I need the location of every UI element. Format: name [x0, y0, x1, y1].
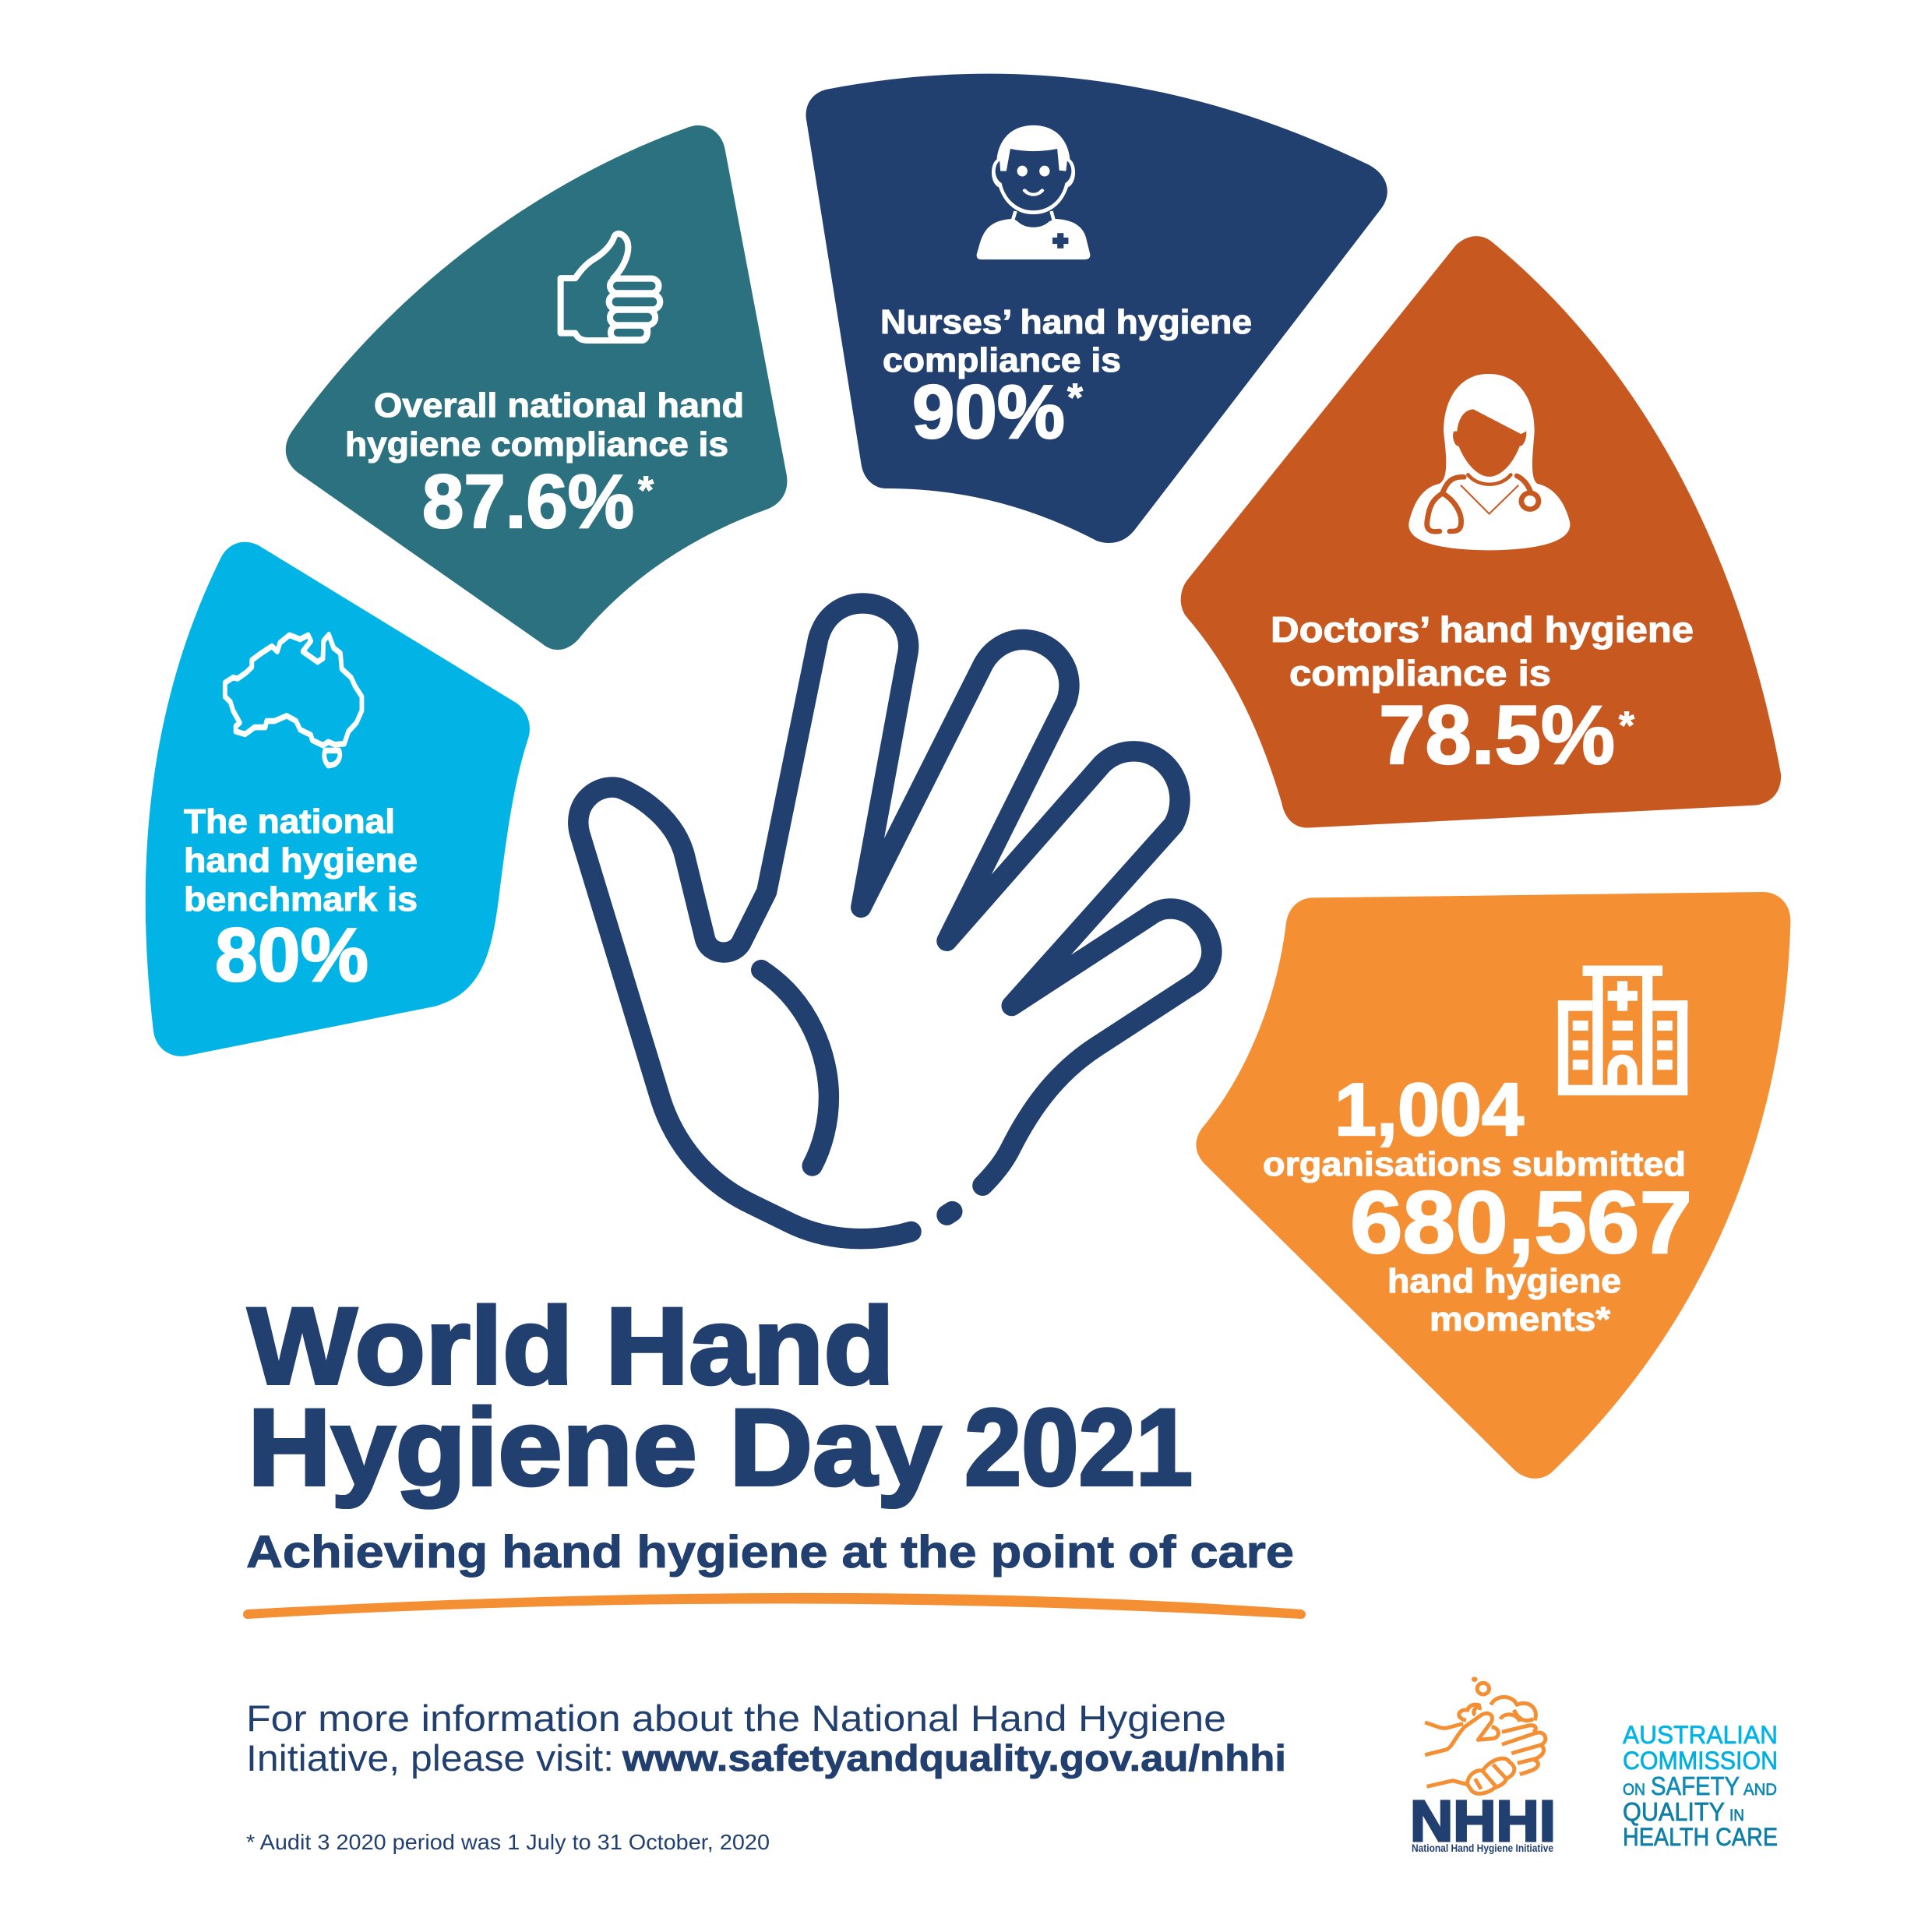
underline swoosh [243, 1593, 1306, 1619]
text: overall label: hygiene compliance is [345, 425, 728, 464]
text: benchmark label: benchmark is [184, 880, 418, 918]
value: 87.6%: 87.6% [422, 459, 634, 544]
title [248, 1285, 1193, 1508]
panel shape: teal segment [286, 125, 787, 650]
text: more information: For more information about the National Hand Hygiene [246, 1698, 1226, 1739]
text: benchmark label: hand hygiene [184, 841, 418, 880]
text: nurses label: compliance is [883, 341, 1121, 379]
panel shape: navy segment [806, 74, 1387, 543]
title: World Hand [248, 1285, 894, 1407]
tagline: National Hand Hygiene Initiative [1412, 1842, 1553, 1854]
icon: hospital building [1558, 965, 1687, 1095]
text: more information [246, 1698, 1286, 1779]
text: organisations submitted: organisations submitted [1263, 1145, 1686, 1183]
text: more information: Initiative, please visit: [246, 1737, 614, 1779]
text: hand hygiene moments: hand hygiene [1387, 1262, 1621, 1300]
text: nurses label [880, 303, 1252, 379]
logo: Australian Commission on Safety and Quality in Health Care: QUALITY [1623, 1797, 1725, 1826]
text: nurses label: Nurses’ hand hygiene [880, 303, 1252, 341]
panel: doctors compliance [1181, 236, 1781, 828]
logo: Australian Commission on Safety and Quality in Health Care: ON [1623, 1781, 1645, 1799]
value: 1,004: 1,004 [1334, 1068, 1524, 1151]
text: benchmark label [184, 802, 418, 918]
panel shape: cyan segment [146, 542, 530, 1056]
wordmark: NHHI: NHHI [1410, 1789, 1556, 1853]
icon: doctor [1408, 374, 1570, 550]
text: more information: www.safetyandquality.gov.au/nhhi [622, 1737, 1286, 1779]
footnote mark: * [1619, 703, 1635, 747]
logo: Australian Commission on Safety and Quality in Health Care: HEALTH CARE [1623, 1823, 1778, 1851]
title: 2021 [964, 1386, 1193, 1508]
footnote: * Audit 3 2020 period was 1 July to 31 October, 2020 [246, 1830, 770, 1854]
footnote mark: * [638, 468, 654, 512]
footnote mark: * [1067, 375, 1084, 419]
logo: Australian Commission on Safety and Quality in Health Care [1623, 1721, 1778, 1851]
logo: Australian Commission on Safety and Quality in Health Care: IN [1729, 1807, 1744, 1824]
text: hand hygiene moments [1387, 1262, 1621, 1338]
logo: Australian Commission on Safety and Quality in Health Care: AUSTRALIAN [1623, 1721, 1778, 1749]
panel: nurses compliance [806, 74, 1387, 543]
text: doctors label [1271, 609, 1694, 693]
panel: national benchmark [146, 542, 530, 1056]
text: doctors label: Doctors’ hand hygiene [1271, 609, 1694, 650]
text: doctors label: compliance is [1289, 653, 1551, 693]
icon: washing hands [1425, 1676, 1546, 1793]
panel: overall national compliance [286, 125, 787, 650]
text: hand hygiene moments: moments* [1430, 1300, 1611, 1338]
logo: Australian Commission on Safety and Quality in Health Care: AND [1743, 1781, 1777, 1799]
logo: NHHI [1410, 1676, 1556, 1854]
panel: organisations and moments [1196, 892, 1790, 1479]
panel shape: orange segment [1196, 892, 1790, 1479]
subtitle: Achieving hand hygiene at the point of care [246, 1527, 1294, 1578]
value: 680,567: 680,567 [1350, 1173, 1692, 1271]
text: benchmark label: The national [184, 802, 395, 841]
value: 90%: 90% [912, 369, 1065, 454]
icon: thumbs up [561, 234, 660, 340]
logo: Australian Commission on Safety and Quality in Health Care: COMMISSION [1623, 1747, 1778, 1775]
value: 78.5%: 78.5% [1379, 688, 1615, 781]
text: overall label [345, 386, 744, 464]
panel shape: rust segment [1181, 236, 1781, 828]
logo: Australian Commission on Safety and Quality in Health Care: SAFETY [1651, 1772, 1740, 1800]
value: 80%: 80% [215, 912, 368, 997]
icon: map of Australia [225, 635, 361, 766]
illustration: open hand outline [578, 603, 1211, 1239]
title: Hygiene Day [248, 1386, 941, 1508]
text: overall label: Overall national hand [374, 386, 744, 425]
icon: nurse [977, 125, 1090, 259]
